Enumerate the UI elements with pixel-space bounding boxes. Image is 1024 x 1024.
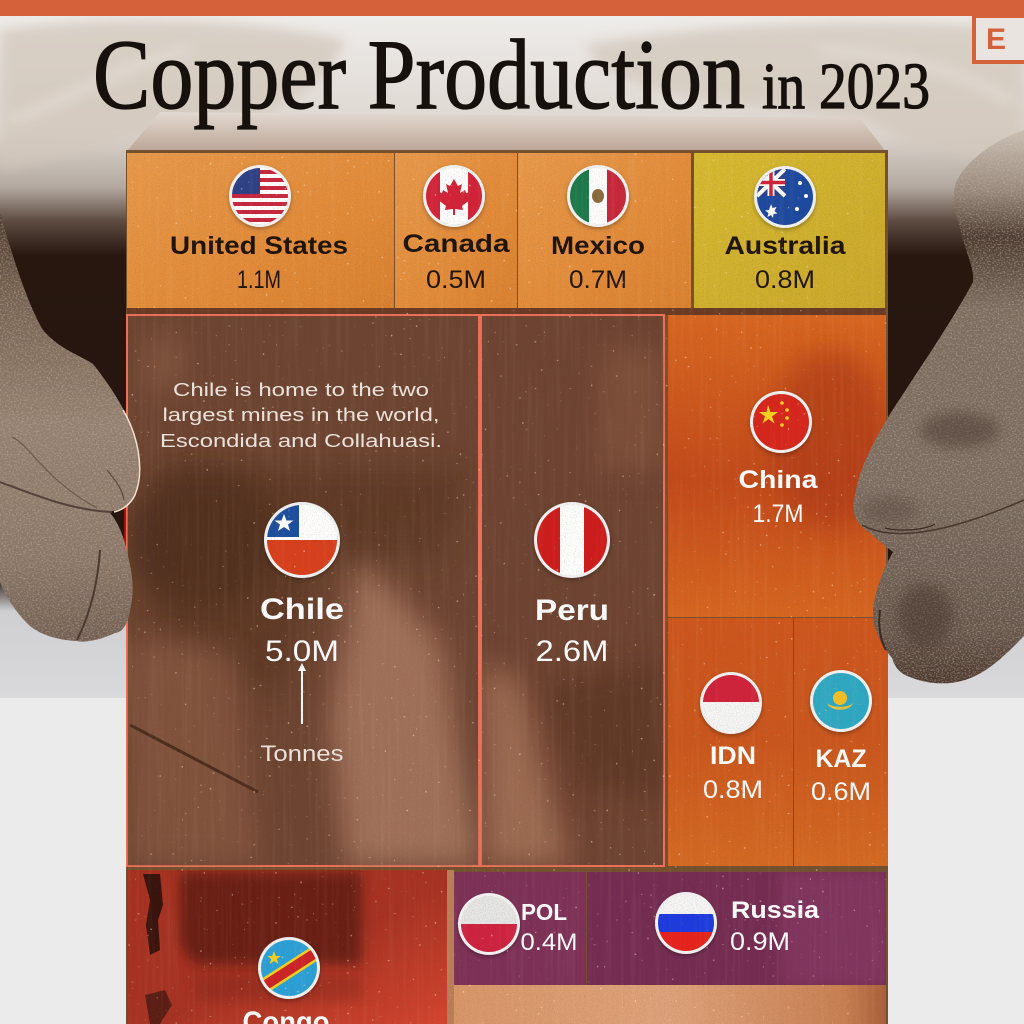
panel: Russia [587,872,886,985]
sleeves behind title [0,20,1024,170]
panel: Indonesia [668,618,793,866]
panel: Mexico [518,153,691,308]
value: Russia: 0.9M [730,928,790,956]
flag: Poland [458,893,520,955]
value: United States: 1.1M [237,266,281,294]
panel: Australia [694,153,885,308]
panel: China [668,315,890,617]
panel: Chile [127,315,480,866]
panel: Canada [395,153,517,308]
left finger crease [0,410,140,640]
label: Tonnes: Tonnes [260,741,344,766]
panel: Poland [454,872,586,985]
Congo panel tonal patches [143,872,362,1024]
right glove [853,130,1024,683]
right finger smudges and creases [862,412,1024,650]
label: Russia: Russia [731,897,820,924]
label: KAZ: KAZ [816,745,866,773]
Chile panel tonal patches [130,330,480,866]
flag: Indonesia [700,672,762,734]
flag: Canada [423,165,485,227]
callout: Chile mines: Escondida and Collahuasi. [160,430,442,451]
label: Canada: Canada [402,230,511,258]
value: Australia: 0.8M [755,266,815,294]
red edge line beside block [124,415,126,600]
label: POL: POL [521,899,567,925]
label: Australia: Australia [724,232,847,260]
panel: Congo [127,870,447,1024]
copper block base [126,150,888,1024]
value: China: 1.7M [752,500,804,528]
brand logo: E [986,23,1006,56]
label: United States: United States [170,232,348,260]
metal block top face [126,112,886,152]
value: Canada: 0.5M [426,266,486,294]
flag: China [750,391,812,453]
label: Chile: Chile [260,593,344,626]
flag: Chile [264,502,340,578]
value: POL: 0.4M [520,929,578,956]
table surface [0,698,1024,1024]
flag: Mexico [567,165,629,227]
panel: Kazakhstan [794,618,888,866]
value: Peru: 2.6M [536,635,608,668]
panel: Peru [481,315,664,866]
title: Copper Production [93,19,745,130]
left glove [0,213,140,642]
label: IDN: IDN [710,742,756,770]
dark band under top row [127,308,886,315]
value: Chile: 5.0M [265,635,339,668]
flag: Congo [258,937,320,999]
gap between Congo and lower right tiles [447,870,454,1024]
flag: United States [229,165,291,227]
Peru panel tonal patches [483,350,664,866]
label: China: China [738,466,819,494]
flag: Russia [655,892,717,954]
label: Mexico: Mexico [551,232,645,260]
callout: Chile mines: Chile is home to the two [173,379,429,400]
China panel tonal patch [770,350,890,530]
Russia panel tonal patch [780,872,886,985]
flag: Kazakhstan [810,670,872,732]
flag: Peru [534,502,610,578]
title: in 2023 [762,50,930,123]
right fingers [853,130,1024,683]
value: Mexico: 0.7M [569,266,627,294]
label: Peru: Peru [535,594,609,627]
value: KAZ: 0.6M [811,778,871,806]
left thumb and finger [0,213,139,642]
arrow: Tonnes pointer [298,663,306,724]
brand logo [974,16,1024,62]
flag: Australia [754,166,816,228]
callout: Chile mines: largest mines in the world, [162,404,440,425]
callout: Chile mines [160,379,442,451]
copper texture overlay [127,153,888,1024]
cloth fold highlights [10,50,1010,120]
panel: United States [127,153,394,308]
value: IDN: 0.8M [703,776,763,804]
top accent bar [0,0,1024,16]
background upper scene [0,16,1024,700]
panel: bottom copper tile [454,985,886,1024]
